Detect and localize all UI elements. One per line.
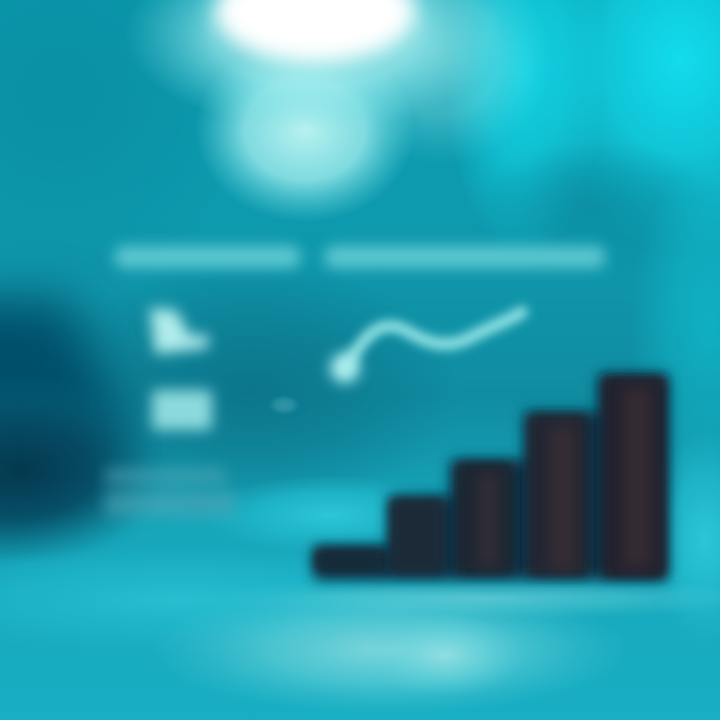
bar 2 [390, 498, 444, 574]
bar backing and gaps [314, 374, 668, 580]
left caption block [105, 468, 235, 516]
bar 5 [602, 376, 666, 578]
bar chart [314, 374, 668, 580]
bar 1 [314, 548, 386, 572]
icon: lower left symbol [152, 390, 212, 430]
bar highlights [478, 388, 650, 570]
line chart [330, 312, 522, 383]
bar 3 [456, 462, 514, 574]
floor reflection [0, 475, 720, 715]
icon: upper left symbol [150, 308, 208, 354]
light source: sun glow [125, 0, 550, 222]
title band [115, 246, 605, 268]
bar 4 [528, 414, 588, 576]
small dot [268, 395, 300, 415]
